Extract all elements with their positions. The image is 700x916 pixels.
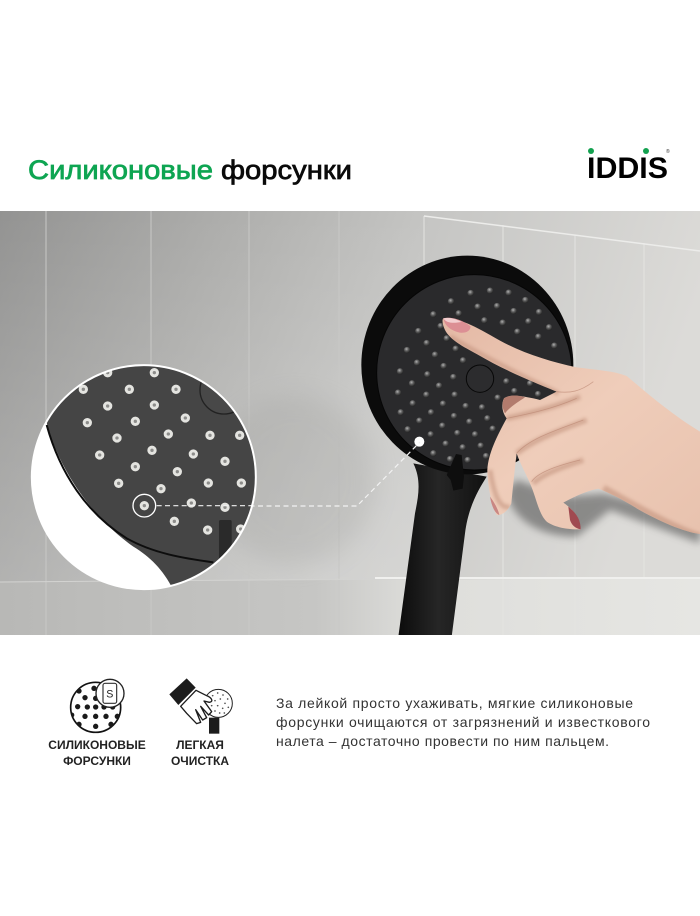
title: second word: форсунки bbox=[221, 155, 352, 185]
icon: silicone nozzles: S bbox=[106, 688, 113, 700]
nozzles bbox=[395, 287, 557, 463]
description text: форсунки очищаются от загрязнений и известкового bbox=[276, 714, 650, 730]
soft wall shadow bbox=[242, 404, 371, 560]
description text: За лейкой просто ухаживать, мягкие силиконовые bbox=[276, 695, 633, 711]
tile grout lines bbox=[0, 211, 700, 635]
hand bbox=[443, 318, 700, 537]
logo: iDDiS: ® bbox=[666, 148, 670, 155]
wall lighting bbox=[0, 388, 410, 582]
highlight ring bbox=[133, 494, 156, 517]
logo: iDDiS: IDDIS bbox=[587, 152, 668, 185]
centre button bbox=[466, 365, 494, 392]
label: easy cleaning: ЛЕГКАЯ bbox=[176, 738, 224, 752]
wall background bbox=[0, 211, 700, 582]
magnified nozzles bbox=[80, 369, 244, 533]
description text: налета – достаточно провести по ним пальцем. bbox=[276, 733, 609, 749]
fingernails bbox=[443, 318, 581, 529]
hand shading bbox=[450, 337, 700, 537]
main shower head group bbox=[361, 256, 700, 637]
title: Силиконовые bbox=[28, 155, 213, 185]
shower head outer body bbox=[361, 256, 573, 474]
finger separations bbox=[507, 382, 593, 482]
magnified button arc bbox=[199, 382, 234, 415]
icon: silicone nozzles bbox=[69, 679, 124, 732]
lower tiles bbox=[202, 579, 700, 635]
dashed leader line bbox=[253, 442, 420, 507]
magnified slider bbox=[219, 520, 232, 563]
hand shadow bbox=[507, 480, 700, 543]
magnified head rim line bbox=[47, 425, 213, 562]
inset dashed segment bbox=[156, 505, 252, 506]
label: easy cleaning: ОЧИСТКА bbox=[171, 754, 229, 768]
slider switch bbox=[447, 454, 464, 491]
label: silicone nozzles: ФОРСУНКИ bbox=[63, 754, 131, 768]
inset white background bbox=[32, 423, 170, 588]
magnified head surface bbox=[46, 366, 255, 585]
description text bbox=[276, 695, 650, 749]
magnified nozzle inset bbox=[32, 360, 273, 590]
photo: shower head and hand on tiled wall bbox=[0, 211, 700, 637]
label: silicone nozzles: СИЛИКОНОВЫЕ bbox=[48, 738, 146, 752]
shower handle bbox=[398, 463, 487, 637]
shower head face bbox=[377, 275, 572, 470]
inset border bbox=[32, 365, 256, 589]
white marker dot bbox=[414, 437, 424, 447]
icon: easy cleaning bbox=[169, 678, 232, 734]
